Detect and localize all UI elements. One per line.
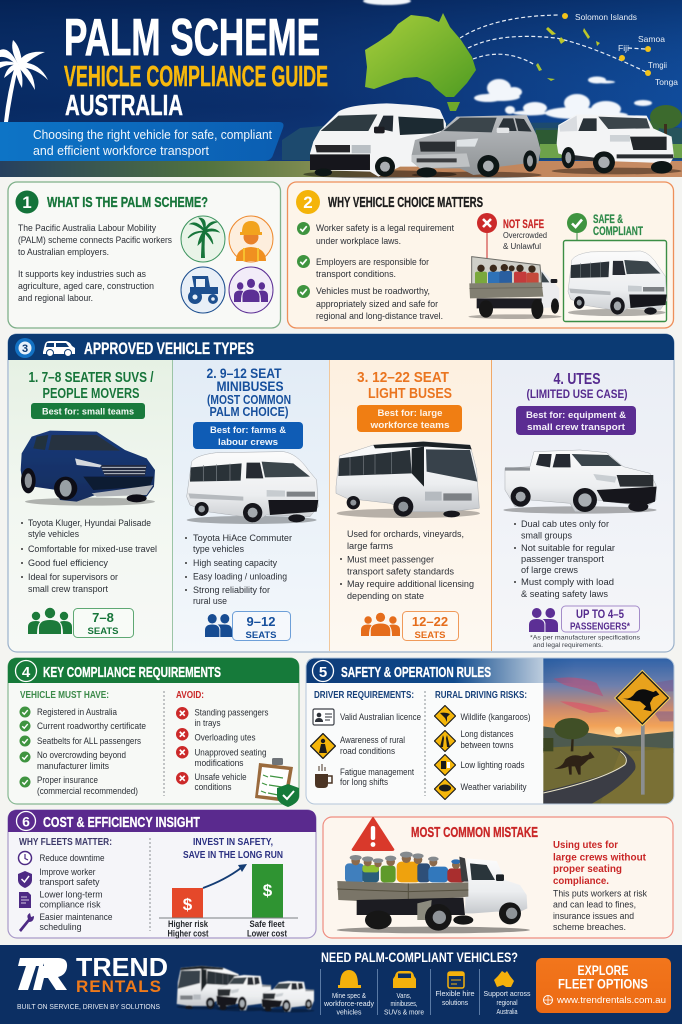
seats badge (361, 612, 458, 641)
avoid list: Unapproved seating (194, 748, 266, 758)
heading: SAFETY & OPERATION RULES (341, 664, 491, 681)
bullets: Ideal for supervisors or (28, 572, 118, 582)
driver requirements (311, 690, 421, 788)
island labels: Samoa (638, 34, 665, 44)
island labels: Tmgii (648, 60, 667, 70)
chart: invest in safety: INVEST IN SAFETY, (193, 836, 273, 848)
why fleets matter list: Easier maintenance (40, 912, 112, 922)
section header bar (8, 334, 674, 360)
panel: section 2 why vehicle choice matters (288, 182, 674, 328)
driver requirements: for long shifts (340, 777, 388, 787)
feature: mine spec: workforce-ready (323, 999, 374, 1008)
body text: The Pacific Australia Labour Mobility (18, 223, 156, 233)
image: overcrowded ute rear view (468, 257, 562, 319)
column 4: utes: 4. UTES (554, 371, 600, 388)
checklist: Worker safety is a legal requirement (316, 223, 454, 233)
icon: people (229, 267, 273, 313)
avoid list (176, 690, 269, 792)
number badge 5: 5 (319, 664, 327, 681)
number badge 2: 2 (303, 193, 313, 212)
footnote: and legal requirements. (533, 642, 603, 649)
avoid list: conditions (194, 782, 232, 792)
bullets: passenger transport (521, 554, 605, 564)
pill: best for: Best for: farms & (210, 425, 286, 436)
number badge 5 (312, 660, 334, 682)
avoid list: Unsafe vehicle (194, 772, 246, 782)
section header bar (306, 658, 575, 683)
warning text (553, 839, 647, 932)
rural driving risks: Wildlife (kangaroos) (460, 712, 530, 722)
not safe callout: Overcrowded (503, 231, 547, 240)
warning text: large crews without (553, 852, 646, 864)
warning text: This puts workers at risk (553, 888, 647, 898)
callout heading: NEED PALM-COMPLIANT VEHICLES? (321, 950, 518, 965)
bullets: small groups (521, 530, 572, 540)
image: light bus (336, 442, 480, 518)
image: outback road at sunset with kangaroo sign (543, 658, 677, 805)
panel: section 6 cost and efficiency insight (8, 810, 316, 938)
seats badge: 9–12 (247, 614, 275, 629)
driver requirements: road conditions (340, 746, 395, 756)
why fleets matter list: scheduling (40, 922, 82, 932)
passengers badge: PASSENGERS* (570, 622, 630, 632)
body text: to Australian employers. (18, 247, 109, 257)
icon: palm (181, 216, 225, 262)
button: explore fleet options: EXPLORE (578, 963, 628, 978)
heading: KEY COMPLIANCE REQUIREMENTS (43, 664, 221, 681)
logo: Trend Rentals: RENTALS (76, 977, 161, 996)
island markers (536, 13, 651, 81)
feature: mine spec: Mine spec & (332, 991, 366, 1000)
footnote: *As per manufacturer specifications (530, 634, 640, 642)
feature: flexible hire: solutions (442, 998, 468, 1007)
checklist: Employers are responsible for (316, 257, 429, 267)
bullets: Good fuel efficiency (28, 558, 108, 568)
avoid list: Overloading utes (194, 732, 256, 742)
feature: regional support: regional (496, 998, 518, 1007)
seats badge: SEATS (246, 630, 276, 641)
distant hills (282, 122, 682, 160)
bullets (514, 519, 615, 599)
column 1: SUVs (21, 369, 157, 638)
column 1: SUVs: PEOPLE MOVERS (42, 385, 140, 402)
bullets: Toyota HiAce Commuter (193, 533, 292, 543)
icon: worker (229, 216, 273, 262)
number badge 6 (16, 812, 36, 830)
ground (0, 161, 682, 177)
driver requirements: Awareness of rural (340, 735, 405, 745)
seats badge: 7–8 (92, 610, 114, 625)
bullets: Must comply with load (521, 577, 614, 587)
avoid list: in trays (194, 718, 221, 728)
bar: higher cost: $ (183, 895, 193, 914)
bullets (185, 533, 292, 606)
column 3: light buses: LIGHT BUSES (368, 385, 452, 402)
chart: invest in safety (159, 836, 298, 938)
bullets: transport safety standards (347, 566, 455, 576)
column 3: light buses: 3. 12–22 SEAT (357, 369, 449, 386)
island labels: Solomon Islands (575, 12, 637, 22)
warning text: compliance. (553, 875, 609, 887)
cab (465, 858, 527, 913)
vehicle must have list: VEHICLE MUST HAVE: (20, 690, 109, 701)
why fleets matter list: Reduce downtime (40, 853, 104, 863)
feature: regional support: Australia (496, 1007, 518, 1016)
pill: best for (193, 422, 303, 449)
why fleets matter list: Lower long-term (40, 890, 102, 900)
avoid list: modifications (194, 758, 244, 768)
rural driving risks: between towns (460, 740, 514, 750)
island labels: Tonga (655, 77, 678, 87)
bullets: Comfortable for mixed-use travel (28, 544, 157, 554)
heading: APPROVED VEHICLE TYPES (84, 339, 254, 358)
bullets: rural use (193, 596, 227, 606)
bullets: May require additional licensing (347, 579, 474, 589)
tagline ribbon: and efficient workforce transport (33, 144, 210, 158)
button: explore fleet options (536, 958, 671, 1013)
vehicle must have list: Seatbelts for ALL passengers (37, 736, 141, 746)
column 2: minibuses: (MOST COMMON (207, 392, 291, 407)
icon: van (43, 341, 75, 356)
number badge 3 (15, 338, 35, 358)
feature: vans: Vans, (396, 991, 412, 1000)
panel: footer (0, 945, 682, 1024)
vehicle must have list: (commercial recommended) (37, 786, 138, 796)
bullets: small crew transport (28, 584, 108, 594)
seats badge: SEATS (415, 630, 445, 641)
image: ute (503, 450, 657, 514)
column 1: SUVs: 1. 7–8 SEATER SUVS / (28, 369, 154, 386)
logo: Trend Rentals (17, 952, 168, 1011)
number badge 3: 3 (22, 343, 28, 355)
column backgrounds (9, 360, 673, 651)
why fleets matter list: WHY FLEETS MATTER: (19, 837, 112, 848)
column 2: minibuses (185, 365, 318, 641)
icon: clipboard with shield (255, 758, 299, 807)
feature: vans: minibuses, (390, 999, 418, 1008)
body text (18, 223, 172, 303)
warning text: and can lead to fines, (553, 900, 636, 910)
bar labels: Safe fleet (250, 919, 284, 929)
feature: flexible hire: Flexible hire (436, 989, 474, 998)
bar labels: Higher cost (168, 928, 208, 938)
number badge 2 (296, 190, 320, 214)
section header bar (8, 658, 299, 683)
button: explore fleet options: FLEET OPTIONS (558, 976, 648, 992)
number badge 4: 4 (22, 664, 31, 681)
tray (337, 881, 468, 903)
number badge 6: 6 (22, 814, 30, 830)
bullets: Must meet passenger (347, 554, 434, 564)
seats badge (28, 608, 134, 638)
seats badge: SEATS (88, 626, 118, 637)
pill: best for: labour crews (218, 437, 278, 448)
vehicle: white ute (552, 114, 682, 174)
tagline ribbon: Choosing the right vehicle for safe, compliant (33, 128, 272, 142)
heading: COST & EFFICIENCY INSIGHT (43, 814, 200, 831)
panel: section 3 approved vehicle types (8, 334, 674, 652)
not safe callout: NOT SAFE (503, 219, 544, 231)
vehicle must have list: Proper insurance (37, 775, 98, 785)
rural driving risks: Weather variability (460, 782, 527, 792)
bullets: Strong reliability for (193, 585, 270, 595)
vehicle must have list: Registered in Australia (37, 707, 117, 717)
bullets: High seating capacity (193, 558, 277, 568)
bullets: Dual cab utes only for (521, 519, 609, 529)
body text: and regional labour. (18, 293, 93, 303)
feature: flexible hire (436, 972, 474, 1007)
panel: header banner (0, 0, 682, 178)
button: explore fleet options: www.trendrentals.com.au (556, 995, 666, 1006)
checklist: transport conditions. (316, 269, 396, 279)
safe and compliant callout: SAFE & (593, 214, 623, 226)
bullets: large farms (347, 541, 394, 551)
pill: best for: Best for: equipment & (526, 410, 626, 421)
seats badge: 12–22 (412, 614, 448, 629)
image: overloaded ute with workers (337, 852, 530, 933)
vehicle must have list: Current roadworthy certificate (37, 721, 146, 731)
bar labels: Higher risk (168, 919, 209, 929)
vehicle must have list: manufacturer limits (37, 761, 109, 771)
heading: MOST COMMON MISTAKE (411, 824, 538, 841)
warning text: proper seating (553, 863, 622, 875)
checklist: appropriately sized and safe for (316, 299, 438, 309)
icon: warning triangle (353, 818, 393, 850)
island labels (575, 12, 678, 87)
column 2: minibuses: 2. 9–12 SEAT (206, 365, 282, 381)
heading: WHY VEHICLE CHOICE MATTERS (328, 194, 483, 211)
body text: It supports key industries such as (18, 269, 146, 279)
rural driving risks: RURAL DRIVING RISKS: (435, 690, 527, 701)
subtitle: vehicle compliance guide: VEHICLE COMPLIANCE GUIDE (64, 61, 328, 93)
field and trees (535, 105, 682, 158)
pill: best for: small crew transport (527, 422, 626, 433)
heading: WHAT IS THE PALM SCHEME? (47, 194, 208, 211)
rural driving risks (434, 690, 530, 800)
map: Australia (365, 13, 476, 111)
bar labels: Lower cost (247, 928, 287, 938)
bullets: style vehicles (28, 529, 79, 539)
island labels: Fiji (618, 43, 629, 53)
panel: section 4 key compliance requirements (8, 658, 299, 807)
column 2: minibuses: PALM CHOICE) (210, 404, 288, 419)
checklist (297, 222, 454, 321)
feature: vans (384, 971, 424, 1016)
passengers badge (529, 606, 640, 632)
column 2: minibuses: MINIBUSES (216, 378, 284, 394)
workers (345, 852, 466, 883)
seats badge (205, 612, 290, 641)
logo: Trend Rentals: TREND (76, 952, 168, 982)
driver requirements: Fatigue management (340, 767, 414, 777)
arrow (203, 864, 247, 888)
checklist: regional and long-distance travel. (316, 311, 443, 321)
section header bar (8, 810, 316, 832)
tagline ribbon (0, 122, 284, 161)
image: blue SUV (21, 431, 155, 506)
driver requirements: DRIVER REQUIREMENTS: (314, 690, 414, 701)
chassis and wheels (357, 898, 465, 915)
not safe callout: & Unlawful (503, 242, 541, 251)
bullets: Easy loading / unloading (193, 572, 287, 582)
pill: best for (357, 405, 462, 432)
feature: regional support: Support across (484, 989, 531, 998)
feature: vans: SUVs & more (384, 1008, 424, 1016)
image: minibus (187, 452, 318, 524)
vehicle must have list: No overcrowding beyond (37, 750, 126, 760)
pill: best for (31, 403, 145, 419)
vehicles: fleet line-up (176, 966, 315, 1013)
title: PALM SCHEME (64, 9, 320, 67)
chart: invest in safety: SAVE IN THE LONG RUN (183, 849, 283, 861)
bullets: type vehicles (193, 544, 244, 554)
driver requirements: Valid Australian licence (340, 712, 421, 722)
pill: best for (516, 406, 636, 435)
panel: section 1 what is the PALM scheme (8, 182, 280, 328)
bullets: Toyota Kluger, Hyundai Palisade (28, 518, 151, 528)
rural driving risks: Long distances (460, 729, 514, 739)
column 4: utes (503, 371, 657, 649)
pill: best for: Best for: large (378, 408, 442, 419)
why fleets matter list (18, 837, 112, 932)
number badge 4 (16, 660, 36, 682)
feature: mine spec: vehicles (336, 1008, 362, 1016)
vehicle: silver SUV (412, 115, 542, 178)
column 4: utes: (LIMITED USE CASE) (526, 387, 628, 401)
number badge 1: 1 (22, 193, 32, 212)
icon: tractor (181, 267, 225, 313)
warning text: Using utes for (553, 839, 618, 851)
warning text: insurance issues and (553, 911, 634, 921)
panel: section 5 safety and operation rules (306, 658, 677, 805)
passengers badge: UP TO 4–5 (576, 607, 624, 621)
image: white minibus (568, 251, 667, 316)
avoid list: AVOID: (176, 690, 204, 701)
body text: (PALM) scheme connects Pacific workers (18, 235, 172, 245)
feature: regional support (484, 971, 531, 1016)
bullets (340, 529, 474, 601)
rural driving risks: Low lighting roads (460, 760, 525, 770)
not safe callout (477, 213, 547, 262)
feature: mine spec (323, 970, 374, 1016)
column 3: light buses (336, 369, 480, 641)
why fleets matter list: transport safety (40, 877, 100, 887)
panel: most common mistake (323, 817, 673, 938)
routes to Pacific islands (460, 15, 646, 72)
why fleets matter list: compliance risk (40, 900, 101, 910)
clouds (363, 0, 652, 119)
vehicle must have list (20, 690, 146, 796)
bullets (21, 518, 157, 594)
icon: palm tree (0, 40, 48, 122)
body text: agriculture, aged care, construction (18, 281, 154, 291)
checklist: Vehicles must be roadworthy, (316, 286, 430, 296)
warning text: scheme breaches. (553, 922, 626, 932)
bullets: Not suitable for regular (521, 543, 615, 553)
subtitle: australia: AUSTRALIA (65, 90, 183, 122)
bullets: Used for orchards, vineyards, (347, 529, 464, 539)
footnote (530, 634, 640, 649)
checklist: under workplace laws. (316, 236, 401, 246)
logo: Trend Rentals: BUILT ON SERVICE, DRIVEN BY SOLUTIONS (17, 1004, 160, 1011)
pill: best for: workforce teams (369, 420, 450, 431)
bullets: depending on state (347, 591, 424, 601)
bullets: of large crews (521, 565, 578, 575)
pill: best for: Best for: small teams (42, 406, 134, 418)
bar labels (168, 919, 287, 938)
avoid list: Standing passengers (194, 708, 269, 718)
safe and compliant callout (564, 213, 666, 322)
bullets: & seating safety laws (521, 589, 609, 599)
why fleets matter list: Improve worker (40, 867, 96, 877)
number badge 1 (16, 190, 38, 214)
vehicle: white van (303, 103, 457, 178)
safe and compliant callout: COMPLIANT (593, 226, 643, 238)
bar: lower cost: $ (263, 881, 273, 900)
